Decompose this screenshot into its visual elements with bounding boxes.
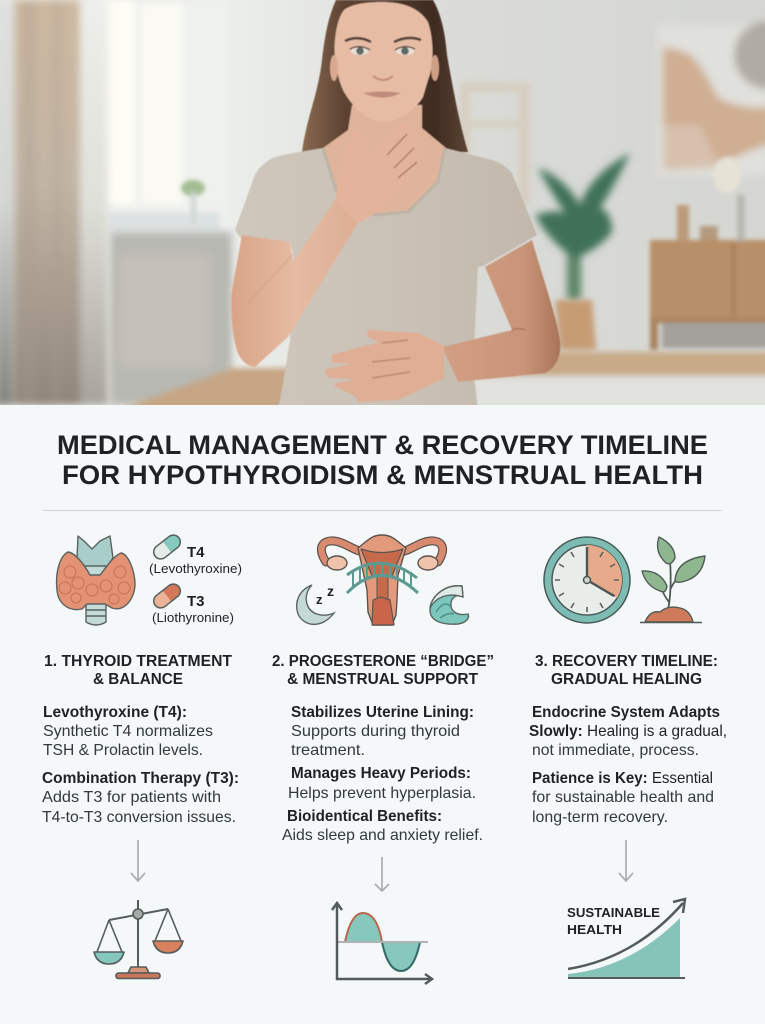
icon: clock (544, 537, 630, 623)
icon: T4 capsule (151, 532, 183, 562)
chart: hormone wave (332, 903, 432, 984)
neck and chest (323, 105, 446, 215)
text: combination therapy: T4-to-T3 conversion issues. (42, 809, 236, 826)
abdomen hand (327, 332, 442, 400)
T3 label: T3 (187, 593, 205, 610)
text: combination therapy: Combination Therapy (T3): (42, 770, 239, 787)
text: levothyroxine: Levothyroxine (T4): (43, 704, 187, 721)
T4 drug name: (Levothyroxine) (149, 561, 242, 576)
heading: & MENSTRUAL SUPPORT (287, 671, 478, 688)
photo: plant pot (555, 300, 596, 350)
text: manages heavy periods: Manages Heavy Periods: (291, 765, 471, 782)
heading: GRADUAL HEALING (551, 671, 702, 688)
title (57, 430, 708, 490)
heading: 2. PROGESTERONE “BRIDGE” (272, 653, 494, 670)
heading: & BALANCE (93, 671, 183, 688)
text: manages heavy periods: Helps prevent hyperplasia. (288, 785, 476, 802)
photo: curtain (0, 0, 108, 405)
text: stabilizes uterine lining: Stabilizes Uterine Lining: (291, 704, 474, 721)
ears (330, 55, 338, 81)
text: endocrine system (529, 704, 727, 759)
panel: column 1 thyroid treatment (42, 532, 242, 978)
text: patience is key: long-term recovery. (532, 809, 668, 826)
right arm (442, 240, 560, 382)
text: patience is key: for sustainable health and (532, 789, 714, 806)
text: stabilizes uterine lining: treatment. (291, 742, 365, 759)
icon: thyroid gland (57, 536, 135, 625)
eyes and brows (351, 47, 369, 55)
icon: moon and zzz (297, 583, 334, 624)
nose (373, 76, 393, 80)
icon: sprout (640, 537, 705, 622)
heading (272, 653, 494, 688)
title: FOR HYPOTHYROIDISM & MENSTRUAL HEALTH (62, 460, 703, 490)
text: bioidentical benefits: Aids sleep and anxiety relief. (282, 827, 483, 844)
photo: shelf behind woman (460, 82, 530, 205)
heading: 1. THYROID TREATMENT (44, 653, 232, 670)
text: manages heavy periods (288, 765, 476, 802)
heading (44, 653, 232, 688)
T3 drug name: (Liothyronine) (152, 610, 234, 625)
chart: sustainable health: SUSTAINABLE (567, 905, 660, 920)
face (334, 2, 432, 122)
photo: woman holding throat and abdomen in a bright room (0, 0, 765, 410)
photo: potted plant (535, 153, 630, 300)
left arm (231, 200, 358, 367)
icon: moon and zzz: z (316, 592, 323, 607)
text: levothyroxine: TSH & Prolactin levels. (43, 742, 203, 759)
photo: floor right (503, 348, 765, 405)
text: levothyroxine (43, 704, 213, 759)
mouth (363, 92, 401, 98)
panel background (0, 405, 765, 1024)
chart: sustainable health (567, 899, 685, 978)
heading (535, 653, 718, 688)
panel: column 2 progesterone (272, 535, 494, 984)
text: endocrine system: not immediate, process. (532, 742, 699, 759)
hair (302, 0, 468, 152)
text: patience is key (532, 770, 714, 826)
arrow (619, 840, 633, 881)
T4 label: T4 (187, 544, 205, 561)
text: levothyroxine: Synthetic T4 normalizes (43, 723, 213, 740)
title: MEDICAL MANAGEMENT & RECOVERY TIMELINE (57, 430, 708, 460)
icon: T3 capsule (151, 581, 183, 611)
text: patience is key: Patience is Key: Essential (532, 770, 713, 787)
photo: floor (118, 368, 290, 410)
shirt (235, 148, 537, 410)
photo: radiator (110, 232, 232, 405)
text: stabilizes uterine lining (291, 704, 474, 759)
text: bioidentical benefits: Bioidentical Benefits: (287, 808, 442, 825)
shirt neckline (323, 148, 445, 215)
throat hand (335, 189, 375, 223)
photo: sideboard (650, 157, 765, 350)
photo: window (106, 0, 220, 230)
photo: wall art (658, 21, 765, 175)
text: combination therapy (42, 770, 239, 826)
arrow (375, 857, 389, 891)
panel: column 3 recovery timeline (529, 537, 727, 978)
icon: uterus with bridge (321, 535, 443, 625)
text: combination therapy: Adds T3 for patients with (42, 789, 221, 806)
text: stabilizes uterine lining: Supports during thyroid (291, 723, 460, 740)
icon: wave (430, 586, 469, 624)
photo: small plant on window (181, 180, 205, 224)
text: endocrine system: Slowly: Healing is a gradual, (529, 723, 727, 740)
heading: 3. RECOVERY TIMELINE: (535, 653, 718, 670)
chart: sustainable health: HEALTH (567, 922, 622, 937)
icon: moon and zzz: z (327, 583, 334, 599)
text: bioidentical benefits (282, 808, 483, 844)
arrow (131, 840, 145, 881)
icon: bridge (347, 562, 418, 593)
text: endocrine system: Endocrine System Adapts (532, 704, 720, 721)
photo: woman (231, 0, 560, 410)
icon: balance scale (94, 900, 183, 978)
